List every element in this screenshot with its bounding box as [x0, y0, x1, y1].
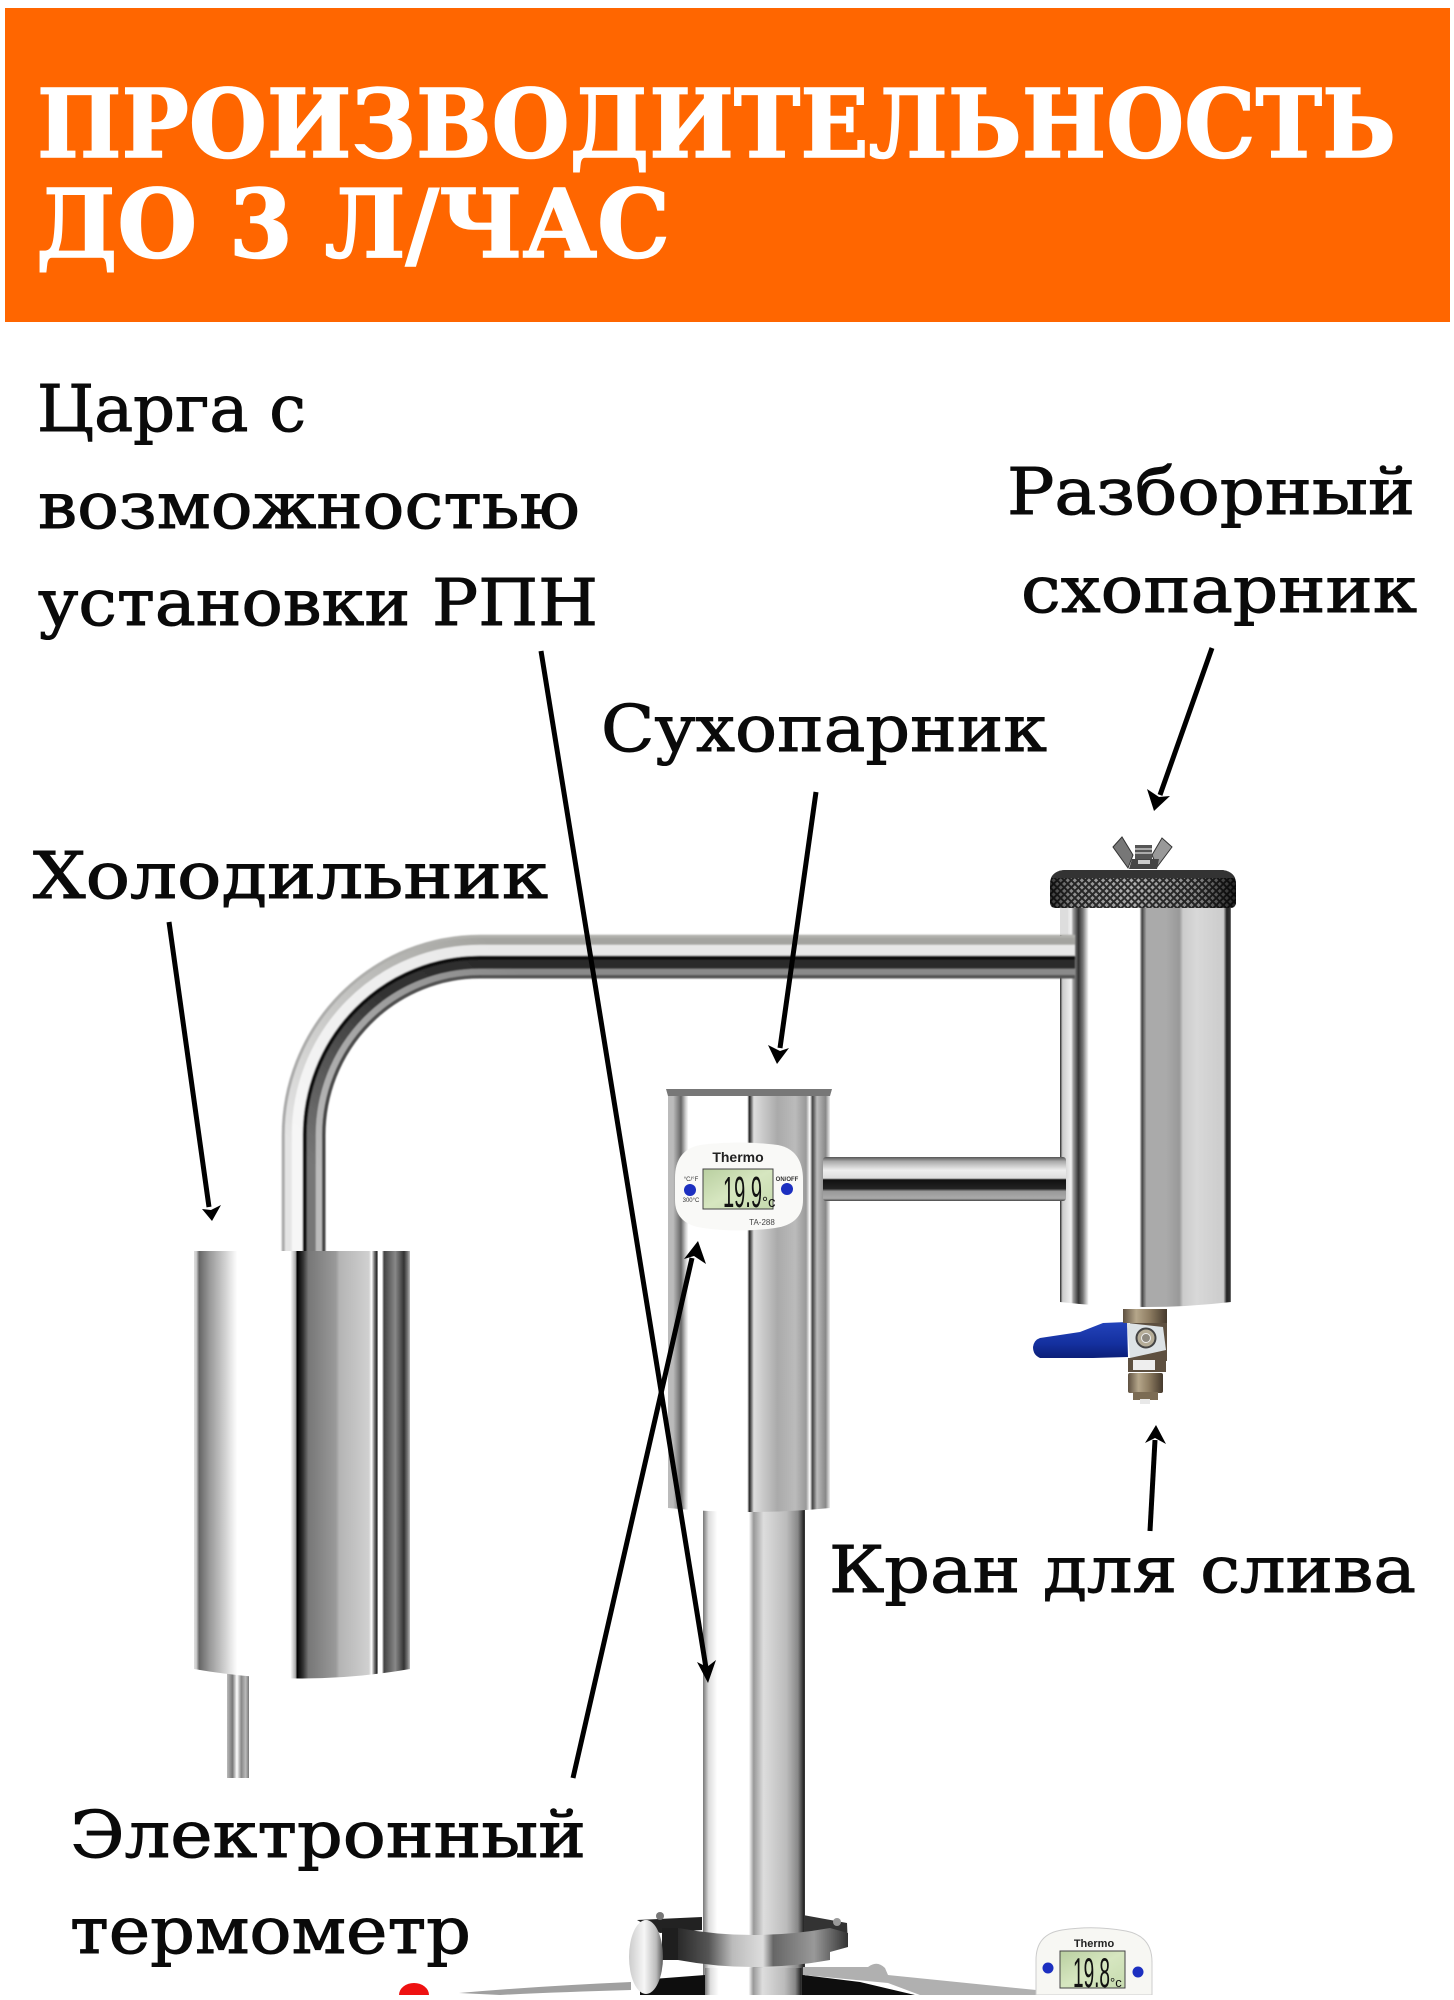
label: Царга с возможностью установки РПН	[37, 372, 598, 641]
second thermometer label: Thermo	[1074, 1938, 1114, 1950]
thermometer label: Thermo	[712, 1149, 764, 1165]
title: ДО 3 Л/ЧАС	[36, 169, 670, 280]
label: Разборный схопарник	[1007, 455, 1417, 628]
second LCD: °c	[1110, 1975, 1122, 1990]
thermometer on column	[675, 1142, 803, 1230]
product photo: distiller	[194, 837, 1236, 1996]
arrow: Сухопарник	[768, 792, 816, 1064]
LCD screen: 19.9	[723, 1168, 762, 1217]
vessel lid left	[459, 1982, 631, 1995]
buttons: 300°C	[683, 1198, 700, 1204]
icon: dry-steam column (Сухопарник)	[666, 1089, 832, 1512]
second LCD: 19.8	[1073, 1949, 1110, 1996]
thermometer bottom	[1036, 1928, 1152, 1996]
valve body	[1127, 1323, 1166, 1358]
arrow: Разборный схопарник	[1147, 648, 1212, 811]
icon: lower column tube	[703, 1505, 805, 1995]
LCD screen: °c	[762, 1194, 776, 1211]
icon: connector pipe	[823, 1157, 1066, 1201]
valve rear housing	[1130, 1323, 1167, 1361]
label: Царга с возможностью установки РПН: возможностью	[38, 469, 580, 544]
thermometer body	[675, 1142, 803, 1230]
buttons	[683, 1177, 799, 1204]
white strip at bottom	[0, 1995, 1454, 2000]
banner background	[5, 8, 1450, 322]
header banner	[5, 8, 1450, 322]
valve bottom nut	[1128, 1373, 1163, 1393]
icon: knurled lid	[1050, 870, 1236, 908]
second LCD	[1060, 1950, 1126, 1988]
label: Электронный термометр: Электронный	[70, 1798, 586, 1873]
vessel lid black dome	[640, 1975, 915, 1995]
icon: red knob	[399, 1983, 429, 1995]
label: Электронный термометр	[70, 1798, 586, 1969]
label: Сухопарник: Сухопарник	[601, 692, 1047, 767]
arrow: Царга	[541, 651, 716, 1683]
model label: TA-288	[749, 1218, 775, 1227]
label: Электронный термометр: термометр	[70, 1894, 471, 1969]
buttons: ON/OFF	[776, 1177, 799, 1183]
icon: cooler outlet tube	[227, 1672, 249, 1778]
icon: drain valve	[1033, 1309, 1167, 1404]
label: Кран для слива: Кран для слива	[829, 1533, 1416, 1608]
title	[36, 69, 1396, 280]
icon: wing nut	[1113, 837, 1172, 869]
label: Разборный схопарник: Разборный	[1007, 455, 1415, 530]
icon: demountable column (Разборный схопарник)	[1060, 905, 1231, 1307]
buttons: °C/°F	[684, 1177, 699, 1183]
label: Холодильник: Холодильник	[33, 839, 548, 914]
arrow: Кран для слива	[1145, 1425, 1166, 1531]
second buttons	[1042, 1962, 1144, 1978]
title: ПРОИЗВОДИТЕЛЬНОСТЬ	[37, 69, 1396, 180]
valve handle	[1033, 1322, 1128, 1358]
label: Царга с возможностью установки РПН: Царга с	[37, 372, 306, 447]
valve top nut	[1123, 1309, 1167, 1323]
arrow: Холодильник	[169, 922, 221, 1221]
icon: tri-clamp	[459, 1912, 1036, 1995]
LCD screen	[702, 1168, 776, 1210]
valve thread	[1128, 1358, 1166, 1372]
arrow: Электронный термометр	[573, 1241, 706, 1778]
second thermometer body	[1036, 1928, 1152, 1995]
vessel lid right	[803, 1964, 1036, 1995]
label: Царга с возможностью установки РПН: установки РПН	[38, 566, 598, 641]
icon: cooler cylinder (Холодильник)	[194, 1251, 410, 1678]
icon: bent steam pipe	[284, 936, 1075, 1255]
label: Разборный схопарник: схопарник	[1021, 553, 1417, 628]
